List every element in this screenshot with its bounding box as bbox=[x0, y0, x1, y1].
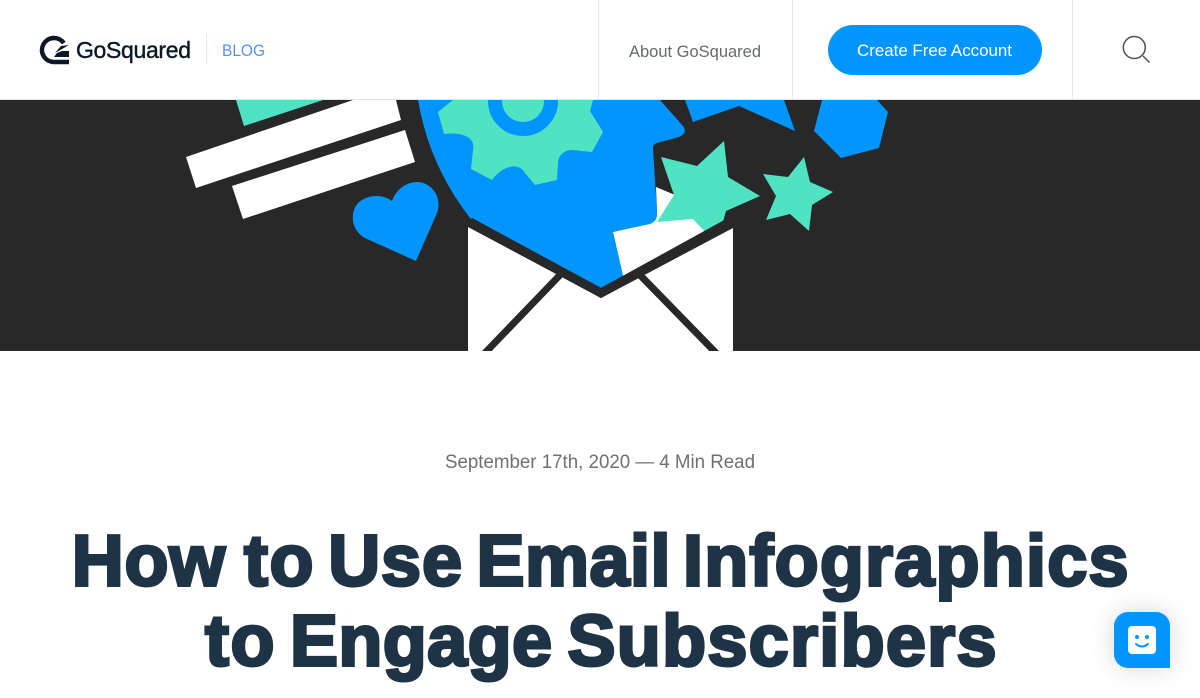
blue envelope top bbox=[685, 100, 795, 131]
header bbox=[0, 0, 1200, 100]
hero illustration bbox=[0, 100, 1200, 351]
blue pentagon bbox=[814, 100, 888, 158]
button bbox=[828, 25, 1042, 75]
title: How bbox=[72, 522, 226, 602]
title: Use bbox=[328, 522, 462, 602]
icon: small star bbox=[763, 157, 833, 231]
title: Email bbox=[476, 522, 670, 602]
title: Subscribers bbox=[568, 602, 996, 682]
nav link: About GoSquared bbox=[629, 42, 761, 61]
blue main shape bbox=[418, 100, 685, 288]
icon: heart bbox=[353, 182, 438, 261]
meta line: September 17th, 2020 — 4 Min Read bbox=[445, 452, 755, 473]
white bar bottom bbox=[232, 130, 415, 219]
green rectangle bbox=[236, 100, 323, 126]
button: Create Free Account bbox=[857, 41, 1012, 60]
title bbox=[72, 522, 1129, 682]
title: to bbox=[205, 602, 274, 682]
logo: GoSquared bbox=[76, 37, 191, 63]
title: to bbox=[244, 522, 314, 602]
blog label: BLOG bbox=[222, 42, 265, 60]
icon: gear bbox=[438, 100, 603, 185]
envelope bbox=[468, 222, 733, 355]
title: Engage bbox=[290, 602, 552, 682]
chat widget bbox=[1114, 612, 1170, 668]
title: Infographics bbox=[683, 522, 1128, 602]
white bar top bbox=[186, 100, 401, 188]
letter behind envelope bbox=[613, 187, 704, 276]
icon: large star bbox=[657, 141, 760, 232]
icon: search bbox=[1123, 36, 1150, 62]
